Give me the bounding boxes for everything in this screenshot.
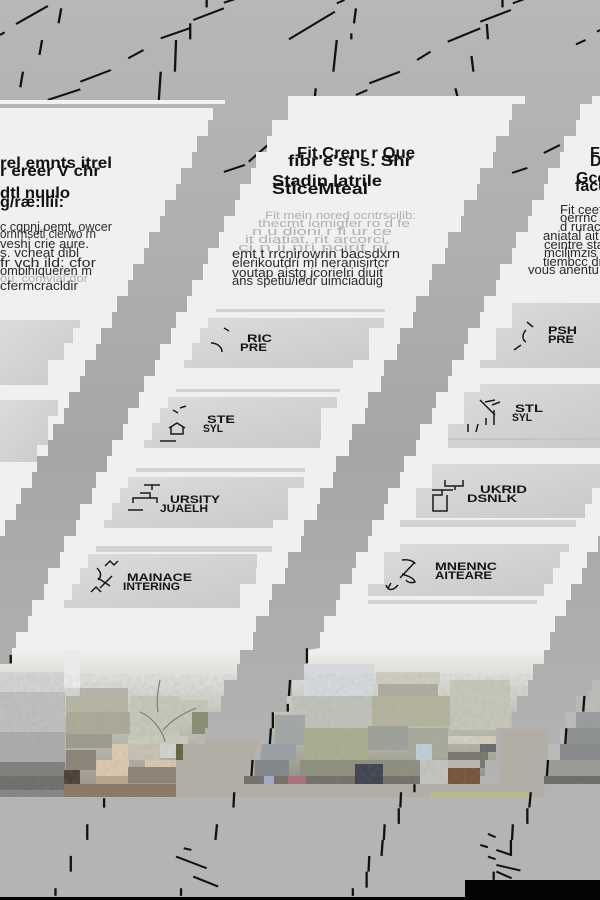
- text block: left panel body: ou. comvial:dor: [0, 273, 88, 285]
- heading: right panel: [575, 145, 600, 195]
- icon: tools: [91, 561, 118, 592]
- text block: middle panel body: n u dioni r fi ur ce: [252, 226, 392, 238]
- card: middle panel service 1: [184, 309, 385, 368]
- box: left panel card 2: [0, 400, 58, 462]
- card: right panel service 2: [448, 384, 600, 448]
- panel: right: [11, 96, 600, 792]
- text block: right panel body: d rurac: [560, 219, 600, 234]
- icon: hierarchy: [432, 480, 463, 511]
- card: middle panel service 2: SYL: [203, 423, 223, 435]
- text block: left panel body: c cqpnj oemt, owcer: [0, 219, 113, 234]
- icon: tool: [514, 322, 533, 350]
- text block: left panel body: [0, 219, 113, 293]
- text block: right panel body: aniatal ait: [543, 228, 599, 243]
- wall dashes over the photo band: [11, 648, 584, 792]
- label: MNENNC: [435, 561, 497, 573]
- left panel top strip: [0, 100, 225, 104]
- heading: middle panel: fibr'e'st s. Shr: [288, 153, 412, 170]
- card: right panel service 4: [368, 544, 569, 604]
- card: right panel service 3: DSNLK: [467, 493, 517, 505]
- icon: house: [160, 406, 186, 441]
- text block: middle panel body: it diatiat, rit arcorci,: [245, 234, 390, 246]
- label: URSITY: [170, 494, 221, 506]
- tree branches: [140, 680, 196, 742]
- box: left panel card 1: [0, 320, 80, 385]
- label: RIC: [247, 333, 272, 345]
- label: UKRID: [480, 484, 527, 496]
- heading: middle panel: Stadin latrile: [272, 173, 382, 190]
- text block: middle panel body: [232, 210, 416, 288]
- text block: right panel body: vous anentu: [528, 262, 599, 277]
- heading: left panel: dtl nuulo: [0, 185, 70, 202]
- card: right panel service 2: SYL: [512, 412, 532, 424]
- card: right panel service 3: [400, 464, 600, 527]
- text block: left panel body: cfermcracldir: [0, 278, 79, 293]
- black bar at bottom: [0, 880, 600, 900]
- text block: left panel body: ornrnsetl clerwo rn: [0, 226, 96, 241]
- text block: left panel body: s. vcheat dibl: [0, 245, 79, 260]
- text block: middle panel body: ci n ii nri ncirit ni: [238, 242, 388, 254]
- tinted band between photos: [176, 730, 548, 797]
- text block: middle panel body: elerikoutdri ml neranisirtcr: [232, 255, 390, 270]
- panel: left: [0, 108, 213, 536]
- label: STE: [207, 414, 235, 426]
- icon: hierarchy: [128, 485, 160, 510]
- card: middle panel service 4: INTERING: [123, 581, 180, 593]
- icon: tool: [211, 328, 229, 352]
- heading: middle panel: [272, 145, 415, 198]
- label: STL: [515, 403, 543, 415]
- photo: campus, right panel: [244, 650, 544, 784]
- card: middle panel service 3: JUAELH: [160, 503, 208, 515]
- heading: left panel: g/ræ:llii:: [0, 194, 64, 211]
- text block: left panel body: fr vch ild: cfor: [0, 255, 97, 270]
- heading: middle panel: SticeMteal: [272, 181, 368, 198]
- card: right panel service 4: AITEARE: [435, 570, 492, 582]
- text block: left panel body: veshi crie aure.: [0, 236, 89, 251]
- card: middle panel service 4: [64, 546, 272, 608]
- text block: middle panel body: Fit mein nored ocntrscilib:: [265, 210, 416, 222]
- card: right panel service 1: PRE: [548, 334, 574, 346]
- panel: middle: [0, 96, 525, 798]
- text block: left panel body: ombihiqueren m: [0, 263, 92, 278]
- label: MAINACE: [127, 572, 192, 584]
- yellow-tinted ground strip: [430, 792, 530, 797]
- photo: campus, cut off at right edge: [544, 680, 600, 784]
- heading: middle panel: Fit Crenr r Que: [297, 145, 415, 162]
- card: middle panel service 3: [104, 468, 305, 528]
- text block: right panel body: [528, 202, 600, 277]
- heading: left panel: [0, 155, 112, 211]
- text block: middle panel body: emt t rrcnirowrin bacsdxrn: [232, 246, 400, 261]
- text block: middle panel body: thecmt iomigfer ro d fe: [258, 218, 410, 230]
- label: PSH: [548, 325, 577, 337]
- photo: campus, middle panel: [0, 650, 245, 798]
- text block: right panel body: mcilimzis: [544, 245, 597, 260]
- heading: left panel: rel emnts itrel: [0, 155, 112, 172]
- icon: hand: [468, 400, 500, 432]
- text block: middle panel body: voutap aistg icorielri diuit: [232, 265, 383, 280]
- text block: middle panel body: ans spetiu/iedr uimciaduig: [232, 273, 383, 288]
- card: middle panel service 1: PRE: [240, 342, 267, 354]
- heading: left panel: r ereer V chr: [0, 163, 100, 180]
- card: right panel service 1: [480, 303, 600, 368]
- icon: tools: [386, 560, 415, 590]
- card: middle panel service 2: [144, 389, 340, 448]
